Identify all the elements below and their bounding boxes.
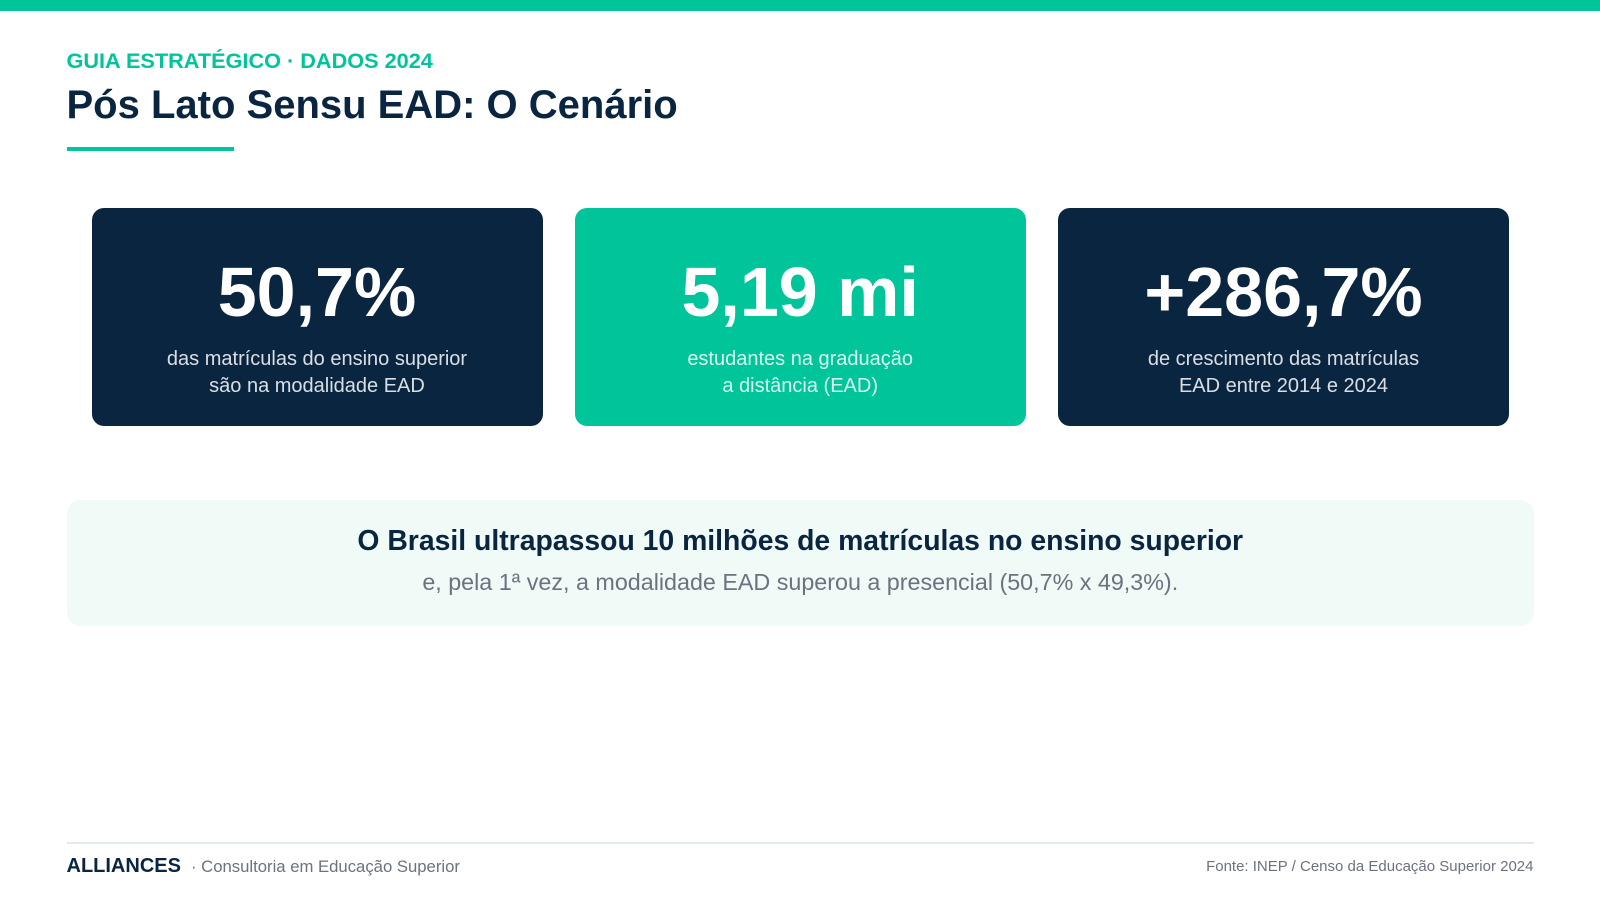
stat description: a distância (EAD): [722, 374, 878, 396]
top accent bar: [0, 0, 1600, 11]
stat value: 50,7%: [218, 253, 416, 331]
stat description: de crescimento das matrículas: [1148, 348, 1419, 370]
stat description: [1148, 348, 1419, 396]
stat description: estudantes na graduação: [687, 348, 913, 370]
stat value: +286,7%: [1144, 253, 1423, 331]
eyebrow: GUIA ESTRATÉGICO · DADOS 2024: [66, 48, 433, 73]
stat description: EAD entre 2014 e 2024: [1179, 374, 1388, 396]
footer brand: ALLIANCES · Consultoria em Educação Superior: [66, 855, 460, 877]
stat card: 50,7%: [92, 208, 542, 426]
stat description: das matrículas do ensino superior: [167, 348, 467, 370]
title: Pós Lato Sensu EAD: O Cenário: [66, 83, 678, 127]
stat card: 5,19 mi: [575, 208, 1026, 426]
stat description: são na modalidade EAD: [209, 374, 425, 396]
callout panel: [66, 500, 1534, 626]
stat description: [687, 348, 913, 396]
stat value: 5,19 mi: [681, 253, 919, 331]
footer source: Fonte: INEP / Censo da Educação Superior 2024: [1206, 858, 1534, 875]
callout text: e, pela 1ª vez, a modalidade EAD superou a presencial (50,7% x 49,3%).: [422, 569, 1178, 595]
callout heading: O Brasil ultrapassou 10 milhões de matrículas no ensino superior: [357, 525, 1243, 557]
stat card: +286,7%: [1058, 208, 1509, 426]
stat description: [167, 348, 467, 396]
title underline: [66, 147, 234, 151]
footer divider: [66, 842, 1534, 844]
